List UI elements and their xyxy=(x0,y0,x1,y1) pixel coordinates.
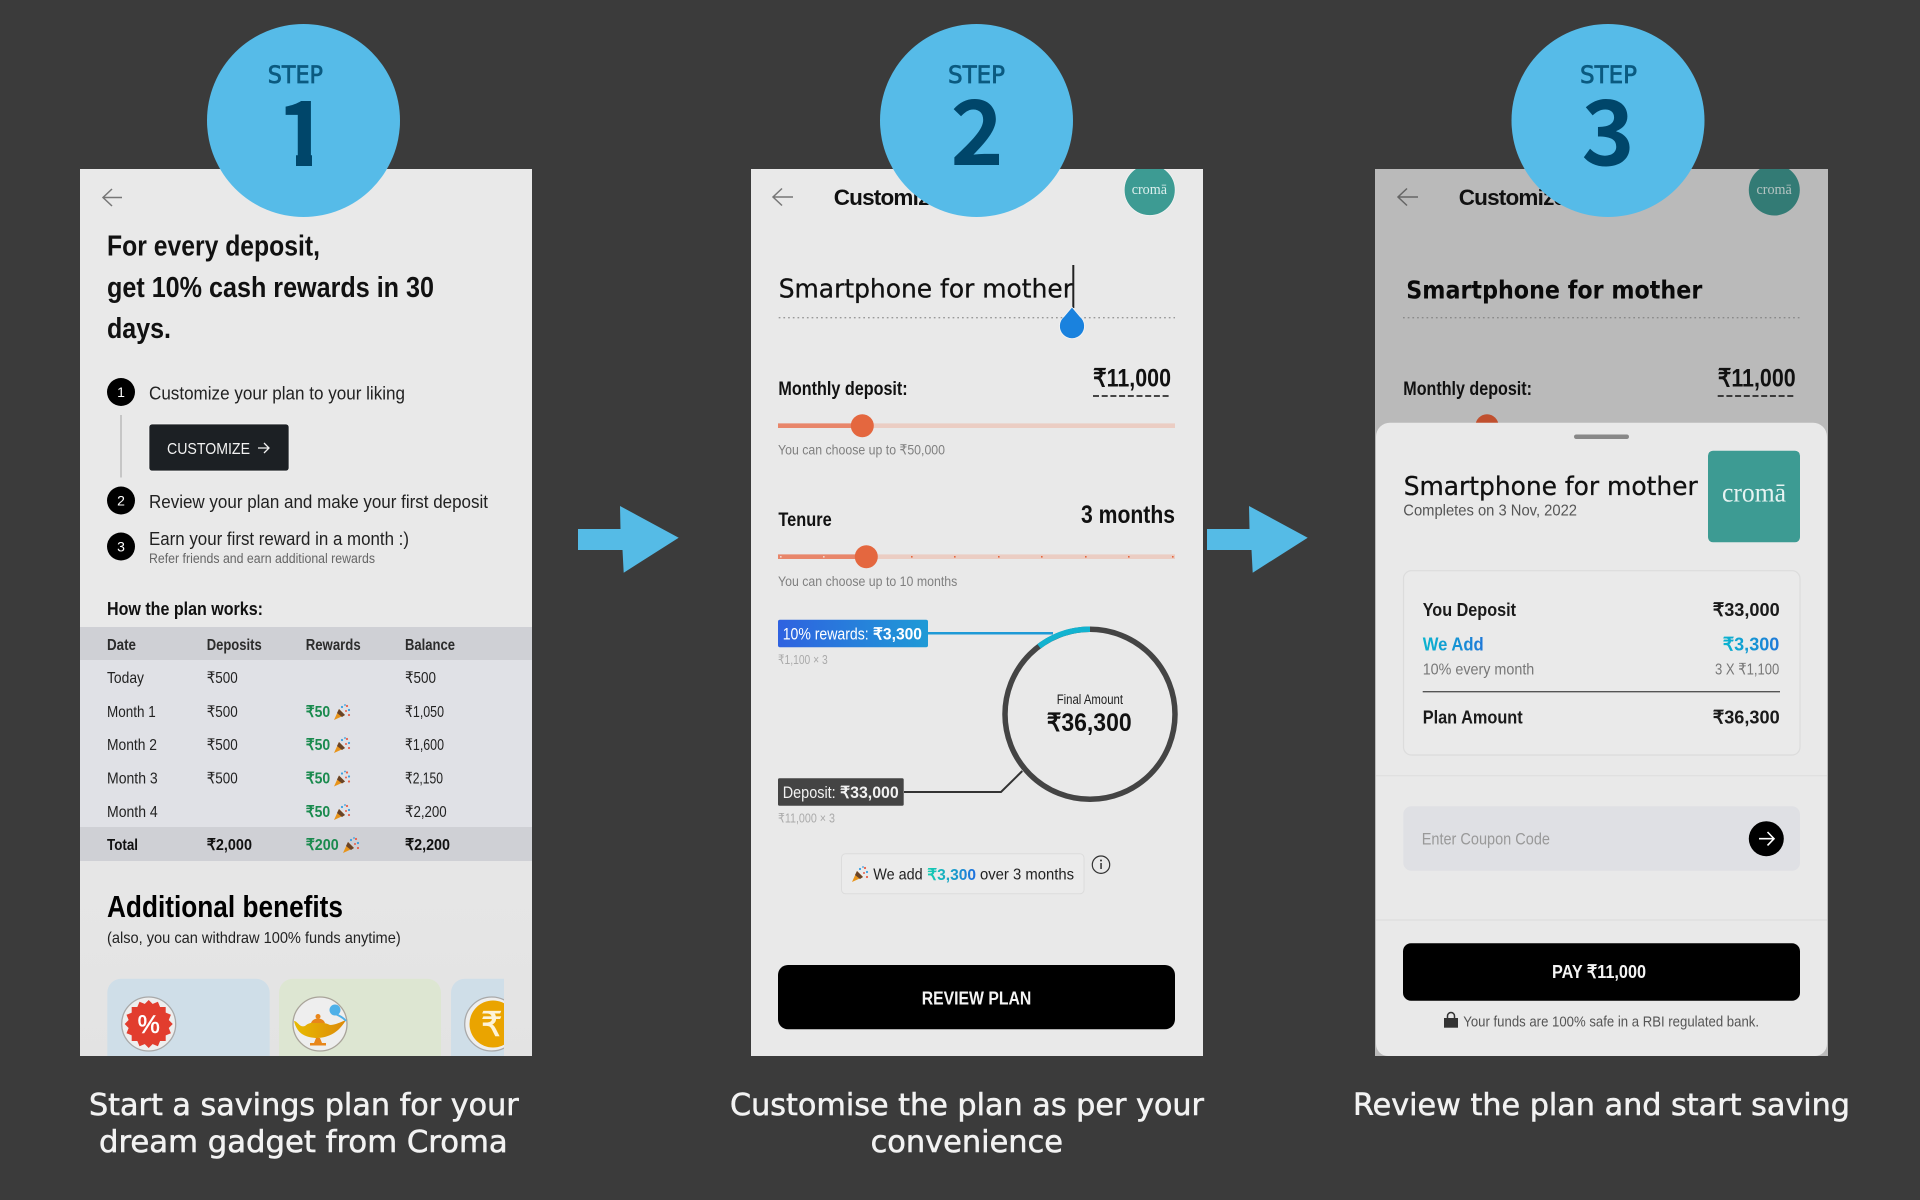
how-to steps list: 2 xyxy=(117,492,125,508)
badge: step 2: 2 xyxy=(950,61,1004,191)
card: rupee coin xyxy=(451,978,504,1056)
badge: step 3 xyxy=(1512,24,1704,217)
summary box: You Deposit xyxy=(1423,599,1516,620)
table: plan schedule: ₹500 xyxy=(405,670,436,687)
logo: croma tile: cromā xyxy=(1722,478,1786,508)
label: deposit: Deposit: xyxy=(783,784,836,802)
heading: cash rewards: days. xyxy=(107,313,171,345)
how-to steps list: Review your plan and make your first deposit xyxy=(149,491,488,512)
panel: step 3 phone screen xyxy=(1375,164,1828,1056)
callout: we add xyxy=(842,854,1084,894)
label: rewards: 10% rewards: xyxy=(783,625,869,643)
table: plan schedule: Deposits xyxy=(207,637,262,654)
card: rupee coin: ₹ xyxy=(481,1006,503,1044)
caption: step 2: Customise the plan as per your xyxy=(730,1088,1205,1123)
how-to steps list xyxy=(107,378,488,566)
button: review plan: REVIEW PLAN xyxy=(922,987,1031,1008)
table: plan schedule: Month 3 xyxy=(107,770,158,788)
heading: additional benefits: Additional benefits xyxy=(107,889,343,924)
summary box xyxy=(1404,571,1800,755)
table: plan schedule: ₹50 xyxy=(306,704,330,721)
how-to steps list: Refer friends and earn additional rewards xyxy=(149,551,375,566)
logo: croma tile xyxy=(1708,451,1800,542)
button: review plan xyxy=(778,965,1175,1029)
slider: monthly deposit xyxy=(778,365,1175,458)
chart: final amount ring xyxy=(778,620,1175,825)
icon: info xyxy=(1092,856,1110,873)
logo: croma badge dimmed xyxy=(1749,164,1800,216)
heading: cash rewards: get 10% cash rewards in 30 xyxy=(107,272,434,304)
badge: step 2: STEP xyxy=(948,61,1005,89)
label: deposit: ₹11,000 × 3 xyxy=(778,810,835,825)
panel: step 1 phone screen xyxy=(80,169,551,1079)
slider: tenure: You can choose up to 10 months xyxy=(778,573,957,589)
button: customize xyxy=(149,424,289,471)
caption: step 1 xyxy=(89,1088,519,1160)
table: plan schedule: ₹2,200 xyxy=(405,837,450,854)
callout: we add: ₹3,300 xyxy=(927,867,976,884)
card: genie lamp xyxy=(279,978,441,1056)
badge: step 3: STEP xyxy=(1580,61,1637,89)
summary box: 3 X ₹1,100 xyxy=(1715,662,1779,679)
icon: back arrow xyxy=(1398,188,1418,206)
table: plan schedule: Rewards xyxy=(306,637,361,654)
callout: we add: We add xyxy=(873,866,923,883)
table: plan schedule: ₹500 xyxy=(207,704,238,721)
table: plan schedule: ₹1,050 xyxy=(405,704,444,721)
button: pay xyxy=(1403,943,1800,1001)
summary box: We Add xyxy=(1423,634,1484,655)
badge: step 2 xyxy=(880,24,1073,217)
input: coupon code: Enter Coupon Code xyxy=(1422,830,1550,848)
table: plan schedule: ₹500 xyxy=(207,670,238,687)
arrow: step 2 to 3 xyxy=(1207,506,1308,573)
slider: tenure: 3 months xyxy=(1081,501,1175,529)
heading: cash rewards: For every deposit, xyxy=(107,230,320,262)
slider: tenure xyxy=(778,501,1175,589)
badge: step 1: STEP xyxy=(268,61,323,89)
label: rewards: ₹3,300 xyxy=(873,625,922,643)
summary box: ₹3,300 xyxy=(1723,634,1779,655)
caption: step 1: Start a savings plan for your xyxy=(89,1088,519,1123)
text: plan name dimmed: Smartphone for mother xyxy=(1406,275,1703,304)
heading: customize plan: Customize Plan xyxy=(1459,185,1615,210)
badge: step 3: 3 xyxy=(1581,61,1635,191)
input: plan name xyxy=(779,265,1175,339)
input: plan name: Smartphone for mother xyxy=(779,275,1073,305)
table: plan schedule: ₹50 xyxy=(306,770,330,788)
how-to steps list: Customize your plan to your liking xyxy=(149,382,405,404)
label: deposit: ₹33,000 xyxy=(840,784,899,802)
badge: step 1: 1 xyxy=(276,62,329,192)
text: completion date: Completes on 3 Nov, 2022 xyxy=(1403,502,1577,519)
card: discount xyxy=(107,978,270,1056)
summary box: ₹33,000 xyxy=(1713,599,1780,620)
table: plan schedule: Balance xyxy=(405,637,455,654)
logo: croma badge dimmed: cromā xyxy=(1756,182,1792,198)
table: plan schedule: ₹2,200 xyxy=(405,804,447,821)
caption: step 1: dream gadget from Croma xyxy=(99,1125,508,1160)
table: plan schedule: ₹1,600 xyxy=(405,737,444,754)
table: plan schedule: Today xyxy=(107,670,144,687)
caption: step 2: convenience xyxy=(871,1125,1063,1160)
caption: step 2 xyxy=(730,1088,1205,1160)
icon: back arrow xyxy=(773,188,793,206)
arrow: step 1 to 2 xyxy=(578,506,679,573)
heading: how the plan works: How the plan works: xyxy=(107,599,263,619)
how-to steps list: Earn your first reward in a month :) xyxy=(149,528,409,549)
chart: final amount ring: Final Amount xyxy=(1057,692,1123,707)
benefit cards xyxy=(107,978,504,1056)
text: withdraw note: (also, you can withdraw 100% funds anytime) xyxy=(107,930,401,947)
slider: tenure: Tenure xyxy=(778,510,832,531)
label: rewards: ₹1,100 × 3 xyxy=(778,652,828,667)
text: monthly deposit dimmed: ₹11,000 xyxy=(1718,365,1796,393)
slider: monthly deposit: ₹11,000 xyxy=(1093,365,1171,393)
table: plan schedule: ₹2,000 xyxy=(207,837,252,854)
button: customize: CUSTOMIZE xyxy=(167,441,250,458)
summary box: Plan Amount xyxy=(1423,706,1523,727)
table: plan schedule: ₹500 xyxy=(207,737,238,754)
table: plan schedule: ₹500 xyxy=(207,770,238,788)
slider: monthly deposit: Monthly deposit: xyxy=(778,379,908,400)
how-to steps list: 3 xyxy=(117,538,125,554)
caption: step 3: Review the plan and start saving xyxy=(1353,1088,1850,1123)
bottom sheet: review xyxy=(1376,423,1827,1056)
table: plan schedule: ₹50 xyxy=(306,737,330,754)
table: plan schedule: Total xyxy=(107,837,138,854)
label: rewards xyxy=(778,620,928,667)
table: plan schedule xyxy=(80,627,532,861)
summary box: ₹36,300 xyxy=(1713,706,1780,727)
badge: step 1 xyxy=(207,24,400,217)
summary box: 10% every month xyxy=(1423,662,1534,679)
heading: customize plan: Customize Plan xyxy=(834,185,990,210)
table: plan schedule: ₹200 xyxy=(306,837,339,854)
table: plan schedule: Month 4 xyxy=(107,804,158,821)
heading: plan name: Smartphone for mother xyxy=(1404,472,1698,502)
chart: final amount ring: ₹36,300 xyxy=(1047,709,1132,737)
label: deposit xyxy=(778,778,904,825)
logo: croma badge xyxy=(1124,164,1175,216)
logo: croma badge: cromā xyxy=(1132,182,1167,198)
how-to steps list: 1 xyxy=(117,384,125,400)
card: discount: % xyxy=(138,1011,160,1039)
button: pay: PAY ₹11,000 xyxy=(1552,961,1646,982)
heading: cash rewards xyxy=(107,230,434,345)
slider: monthly deposit: You can choose up to ₹50,000 xyxy=(778,442,945,458)
table: plan schedule: ₹2,150 xyxy=(405,770,443,788)
table: plan schedule: Month 1 xyxy=(107,704,156,721)
note: safe funds: Your funds are 100% safe in a RBI regulated bank. xyxy=(1463,1015,1759,1031)
text: monthly deposit dimmed xyxy=(1404,368,1795,399)
input: coupon code xyxy=(1403,806,1800,871)
callout: we add: over 3 months xyxy=(980,866,1074,883)
icon: back arrow xyxy=(103,189,122,206)
text: monthly deposit dimmed: Monthly deposit: xyxy=(1403,379,1532,400)
table: plan schedule: Date xyxy=(107,637,136,654)
panel: step 2 phone screen xyxy=(751,164,1203,1056)
table: plan schedule: ₹50 xyxy=(306,804,330,821)
table: plan schedule: Month 2 xyxy=(107,737,157,754)
slider thumb dimmed xyxy=(1476,414,1498,423)
